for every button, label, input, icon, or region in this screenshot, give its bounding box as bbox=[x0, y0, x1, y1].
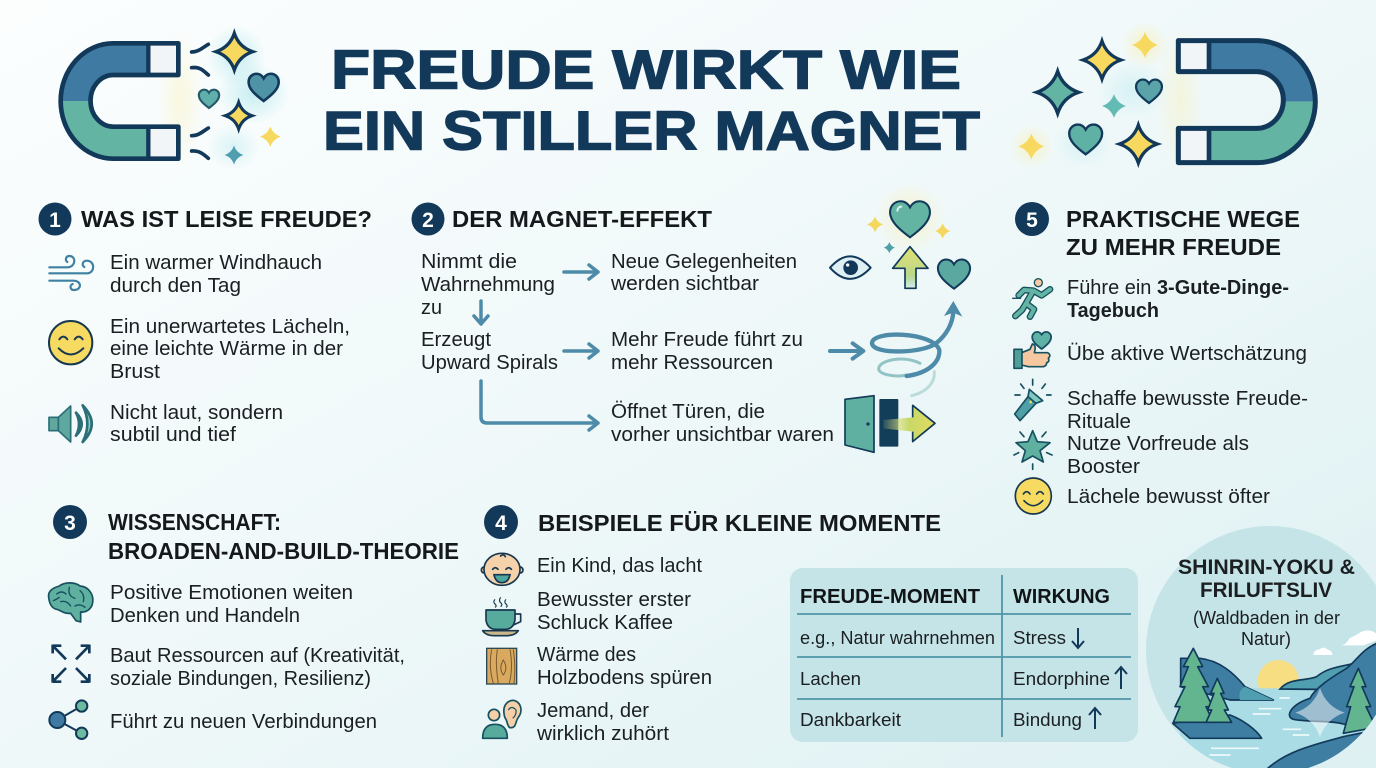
table row: Dankbarkeit bbox=[800, 708, 1101, 730]
panel: kleine Momente bbox=[481, 505, 941, 745]
title: FREUDE WIRKT WIE bbox=[331, 38, 961, 100]
heading 3: 3 bbox=[64, 512, 76, 535]
text: laechele: Lächele bewusst öfter bbox=[1067, 486, 1270, 508]
text: verbindungen: Führt zu neuen Verbindungen bbox=[110, 711, 377, 733]
icon: network bbox=[49, 700, 87, 739]
text: wahrnehmung: Wahrnehmung bbox=[421, 274, 555, 296]
heading 5: 5 bbox=[1026, 209, 1038, 232]
heading 3 bbox=[53, 505, 459, 564]
icon: smiley bbox=[49, 321, 92, 364]
text: windhauch: Ein warmer Windhauch bbox=[110, 252, 322, 274]
heading 3: WISSENSCHAFT: bbox=[108, 509, 281, 535]
icon: perception cluster bbox=[830, 183, 970, 289]
text: wahrnehmung: Nimmt die bbox=[421, 251, 517, 273]
text: nicht laut: subtil und tief bbox=[110, 424, 236, 446]
text: ressourcen: Mehr Freude führt zu bbox=[611, 329, 803, 351]
text: ressourcen bbox=[611, 329, 803, 374]
text: positive emotionen: Denken und Handeln bbox=[110, 605, 300, 627]
text: holzboden: Holzbodens spüren bbox=[537, 667, 712, 689]
panel: der Magnet-Effekt bbox=[412, 183, 970, 452]
text: positive emotionen: Positive Emotionen weiten bbox=[110, 582, 353, 604]
text: ressourcen: Baut Ressourcen auf (Kreativität, bbox=[110, 645, 405, 667]
icon: brain bbox=[49, 583, 93, 622]
table header: FREUDE-MOMENT bbox=[800, 585, 980, 608]
panel: was ist leise Freude bbox=[38, 202, 372, 446]
icon: baby bbox=[481, 553, 523, 585]
table row: Natur: Stress bbox=[1013, 627, 1066, 648]
panel: praktische Wege bbox=[1013, 202, 1308, 514]
text: Waldbaden bbox=[1193, 608, 1340, 649]
text: ressourcen: soziale Bindungen, Resilienz) bbox=[110, 668, 371, 690]
heading: Shinrin-Yoku: SHINRIN-YOKU & bbox=[1178, 556, 1355, 579]
icon: left magnet with sparkles bbox=[57, 25, 290, 170]
table row: Lachen: Lachen bbox=[800, 668, 861, 689]
text: upward spirals: Erzeugt bbox=[421, 329, 491, 351]
text: gelegenheiten bbox=[610, 251, 797, 295]
text: windhauch bbox=[110, 252, 322, 297]
icon: smiley bbox=[1015, 478, 1051, 514]
text: laecheln: eine leichte Wärme in der bbox=[110, 338, 343, 360]
heading 2: DER MAGNET-EFFEKT bbox=[452, 206, 712, 232]
icon: wind bbox=[49, 256, 93, 290]
heading 1: WAS IST LEISE FREUDE? bbox=[81, 206, 372, 232]
text: Waldbaden: Natur) bbox=[1241, 629, 1291, 649]
text: wertschaetzung: Übe aktive Wertschätzung bbox=[1067, 343, 1307, 365]
text: zuhoert: Jemand, der bbox=[537, 700, 649, 722]
text: positive emotionen bbox=[110, 582, 353, 627]
text: rituale: Rituale bbox=[1067, 411, 1131, 433]
text: ressourcen: mehr Ressourcen bbox=[611, 352, 773, 374]
heading 5 bbox=[1015, 202, 1300, 260]
text: vorfreude: Booster bbox=[1067, 456, 1140, 478]
text: kind: Ein Kind, das lacht bbox=[537, 555, 702, 577]
text: upward spirals bbox=[421, 329, 558, 374]
heading 4 bbox=[484, 505, 941, 539]
heading 2: 2 bbox=[422, 209, 434, 232]
text: tagebuch bbox=[1067, 277, 1289, 322]
icon: spiral with arrows bbox=[830, 301, 962, 396]
text: wahrnehmung bbox=[421, 251, 555, 319]
title: EIN STILLER MAGNET bbox=[323, 100, 980, 162]
table row: Dankbarkeit: Dankbarkeit bbox=[800, 709, 901, 730]
icon: hand with heart bbox=[1014, 332, 1051, 368]
icon: coffee cup bbox=[483, 597, 521, 636]
text: Waldbaden: (Waldbaden in der bbox=[1193, 608, 1340, 628]
icon: listening person bbox=[483, 700, 521, 738]
heading 5: ZU MEHR FREUDE bbox=[1066, 234, 1281, 260]
table row: Natur: e.g., Natur wahrnehmen bbox=[800, 627, 995, 648]
text: kaffee bbox=[537, 589, 691, 634]
table header: WIRKUNG bbox=[1013, 585, 1110, 608]
icon: runner bbox=[1013, 279, 1050, 317]
text: laecheln bbox=[110, 316, 350, 383]
heading 5: PRAKTISCHE WEGE bbox=[1066, 206, 1300, 232]
text: holzboden: Wärme des bbox=[537, 644, 636, 666]
icon: door with arrow bbox=[845, 396, 935, 452]
table row: Lachen bbox=[800, 667, 1127, 689]
table row: Dankbarkeit: Bindung bbox=[1013, 709, 1082, 730]
text: tueren: vorher unsichtbar waren bbox=[611, 424, 834, 446]
text: tueren bbox=[611, 401, 834, 446]
heading 2 bbox=[412, 202, 712, 236]
text: kaffee: Bewusster erster bbox=[537, 589, 691, 611]
heading 4: 4 bbox=[495, 512, 507, 535]
icon: speaker bbox=[49, 405, 92, 442]
heading 4: BEISPIELE FÜR KLEINE MOMENTE bbox=[538, 510, 941, 536]
illustration: landscape bbox=[1146, 526, 1376, 768]
text: tagebuch: Führe ein 3-Gute-Dinge- bbox=[1067, 277, 1289, 299]
panel: Shinrin-Yoku circle bbox=[1146, 526, 1376, 768]
text: gelegenheiten: werden sichtbar bbox=[610, 273, 759, 295]
heading 3: BROADEN-AND-BUILD-THEORIE bbox=[108, 538, 459, 564]
table header bbox=[800, 585, 1110, 608]
table row: Lachen: Endorphine bbox=[1013, 668, 1110, 689]
icon: flashlight bbox=[1015, 379, 1051, 421]
text: wahrnehmung: zu bbox=[421, 297, 442, 319]
icon: expand arrows bbox=[53, 645, 89, 683]
table: Freude-Moment und Wirkung bbox=[790, 568, 1138, 742]
text: laecheln: Brust bbox=[110, 361, 160, 383]
text: laecheln: Ein unerwartetes Lächeln, bbox=[110, 316, 350, 338]
text: vorfreude bbox=[1067, 433, 1249, 478]
icon: right magnet with sparkles bbox=[1010, 22, 1320, 177]
text: ressourcen bbox=[110, 645, 405, 690]
icon: wood bbox=[487, 648, 517, 684]
heading 1: 1 bbox=[49, 209, 61, 232]
heading 1 bbox=[38, 202, 372, 236]
heading: Shinrin-Yoku bbox=[1178, 556, 1355, 602]
text: nicht laut bbox=[110, 402, 283, 446]
table row: Natur bbox=[800, 627, 1084, 648]
text: rituale bbox=[1067, 388, 1308, 433]
text: windhauch: durch den Tag bbox=[110, 275, 241, 297]
panel: Wissenschaft bbox=[49, 505, 459, 739]
text: zuhoert bbox=[536, 700, 669, 745]
heading: Shinrin-Yoku: FRILUFTSLIV bbox=[1200, 579, 1332, 602]
text: gelegenheiten: Neue Gelegenheiten bbox=[611, 251, 797, 273]
text: tueren: Öffnet Türen, die bbox=[611, 401, 765, 423]
title bbox=[323, 38, 980, 162]
text: holzboden bbox=[537, 644, 712, 689]
text: rituale: Schaffe bewusste Freude- bbox=[1067, 388, 1308, 410]
text: upward spirals: Upward Spirals bbox=[421, 352, 558, 374]
text: nicht laut: Nicht laut, sondern bbox=[110, 402, 283, 424]
icon: star with rays bbox=[1014, 431, 1052, 469]
arrows: flow bbox=[474, 265, 598, 430]
text: vorfreude: Nutze Vorfreude als bbox=[1067, 433, 1249, 455]
text: zuhoert: wirklich zuhört bbox=[536, 723, 669, 745]
text: tagebuch: Tagebuch bbox=[1067, 300, 1159, 322]
text: kaffee: Schluck Kaffee bbox=[537, 612, 673, 634]
